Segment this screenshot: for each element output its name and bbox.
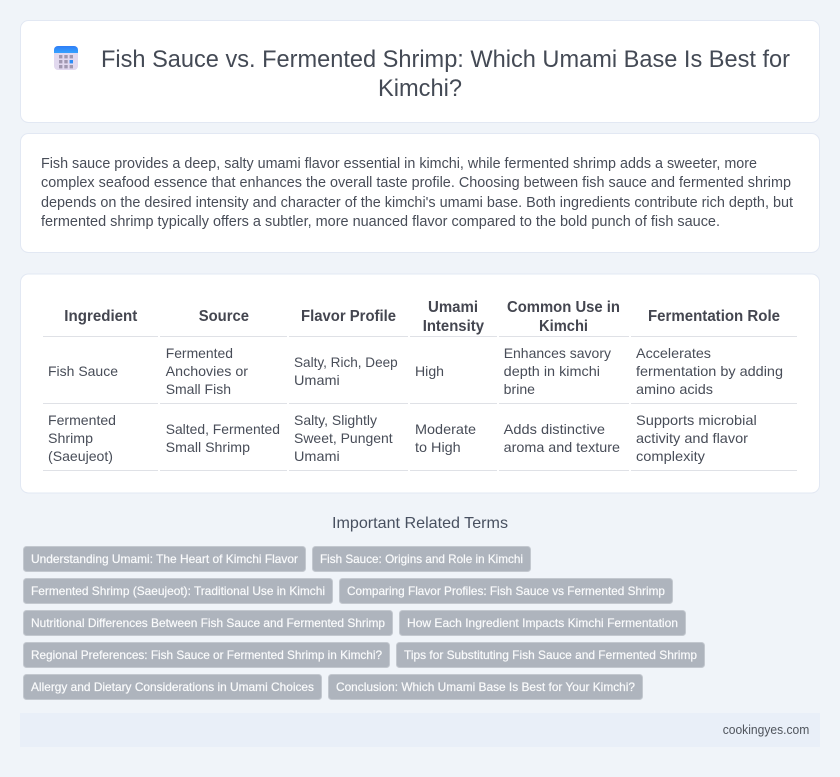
intro paragraph: fermented shrimp typically offers a subtler, more nuanced flavor compared to the bold punch of fish sauce. <box>41 214 720 230</box>
table row: fermented shrimp: Small Shrimp <box>166 439 250 455</box>
table row: fermented shrimp: Salted, Fermented <box>166 421 280 437</box>
table row: fermented shrimp: activity and flavor <box>636 430 748 446</box>
title: Fish Sauce vs. Fermented Shrimp: Which Umami Base Is Best for <box>101 46 790 73</box>
intro paragraph: depends on the desired intensity and character of the kimchi's umami base. Both ingredients contribute rich depth, but <box>41 195 793 211</box>
intro paragraph: complex seafood essence that enhances the overall taste profile. Choosing between fish sauce and fermented shrimp <box>41 175 791 191</box>
heading: important related terms: Important Related Terms <box>332 515 508 532</box>
related term tags: Tips for Substituting Fish Sauce and Fermented Shrimp <box>404 648 697 662</box>
icon: calendar <box>54 46 78 70</box>
related term tags: Regional Preferences: Fish Sauce or Fermented Shrimp in Kimchi? <box>31 648 382 662</box>
table row: fermented shrimp: Adds distinctive <box>504 421 605 437</box>
related term tags: Nutritional Differences Between Fish Sauce and Fermented Shrimp <box>31 616 385 630</box>
table header row: Flavor Profile <box>301 308 396 325</box>
table header row <box>64 299 780 335</box>
title: Kimchi? <box>378 75 462 102</box>
table row: fish sauce: Fermented <box>166 345 233 361</box>
table row: fermented shrimp: Moderate <box>415 421 476 437</box>
related term tags: Comparing Flavor Profiles: Fish Sauce vs Fermented Shrimp <box>347 584 665 598</box>
table header row: Kimchi <box>539 318 588 335</box>
table row: fish sauce: Accelerates <box>636 345 711 361</box>
related term tags: Fermented Shrimp (Saeujeot): Traditional Use in Kimchi <box>31 584 325 598</box>
table row: fish sauce: brine <box>504 381 535 397</box>
table row: fermented shrimp: (Saeujeot) <box>48 448 113 464</box>
table row: fermented shrimp: Sweet, Pungent <box>294 430 393 446</box>
table header row: Common Use in <box>507 299 620 316</box>
panel: intro text <box>20 134 820 252</box>
intro paragraph <box>41 156 793 230</box>
table row: fish sauce: Small Fish <box>166 381 231 397</box>
table row: fermented shrimp: Salty, Slightly <box>294 412 377 428</box>
table row: fish sauce: High <box>415 363 444 379</box>
footer bar: cookingyes.com <box>723 723 809 737</box>
table row: fish sauce: Enhances savory <box>504 345 611 361</box>
panel: header <box>20 20 820 122</box>
related term tags: Conclusion: Which Umami Base Is Best for Your Kimchi? <box>336 680 635 694</box>
table header row: Intensity <box>423 318 484 335</box>
related term tags <box>24 546 704 700</box>
related term tags: How Each Ingredient Impacts Kimchi Fermentation <box>407 616 678 630</box>
table row: fermented shrimp <box>48 412 757 464</box>
table row: fermented shrimp: Fermented <box>48 412 116 428</box>
table header row: Source <box>199 308 249 325</box>
table row: fermented shrimp: Umami <box>294 448 340 464</box>
table row: fish sauce: Umami <box>294 372 340 388</box>
table row: fish sauce <box>48 345 783 397</box>
table row: fermented shrimp: Supports microbial <box>636 412 757 428</box>
table header row: Fermentation Role <box>648 308 780 325</box>
related term tags: Allergy and Dietary Considerations in Umami Choices <box>31 680 314 694</box>
related term tags: Understanding Umami: The Heart of Kimchi Flavor <box>31 552 298 566</box>
table row: fish sauce: fermentation by adding <box>636 363 783 379</box>
panel: comparison table <box>20 274 820 493</box>
table header row: Ingredient <box>64 308 138 325</box>
title <box>101 46 790 102</box>
table row: fermented shrimp: Shrimp <box>48 430 93 446</box>
table header row: Umami <box>428 299 478 316</box>
table row: fermented shrimp: complexity <box>636 448 705 464</box>
intro paragraph: Fish sauce provides a deep, salty umami flavor essential in kimchi, while fermented shrimp adds a sweeter, more <box>41 156 757 172</box>
table row: fish sauce: Salty, Rich, Deep <box>294 354 398 370</box>
table row: fermented shrimp: aroma and texture <box>504 439 620 455</box>
table row: fish sauce: amino acids <box>636 381 713 397</box>
footer bar <box>20 713 820 747</box>
table row: fish sauce: depth in kimchi <box>504 363 600 379</box>
related term tags: Fish Sauce: Origins and Role in Kimchi <box>320 552 523 566</box>
table row: fish sauce: Anchovies or <box>166 363 248 379</box>
table row: fish sauce: Fish Sauce <box>48 363 118 379</box>
table row: fermented shrimp: to High <box>415 439 461 455</box>
